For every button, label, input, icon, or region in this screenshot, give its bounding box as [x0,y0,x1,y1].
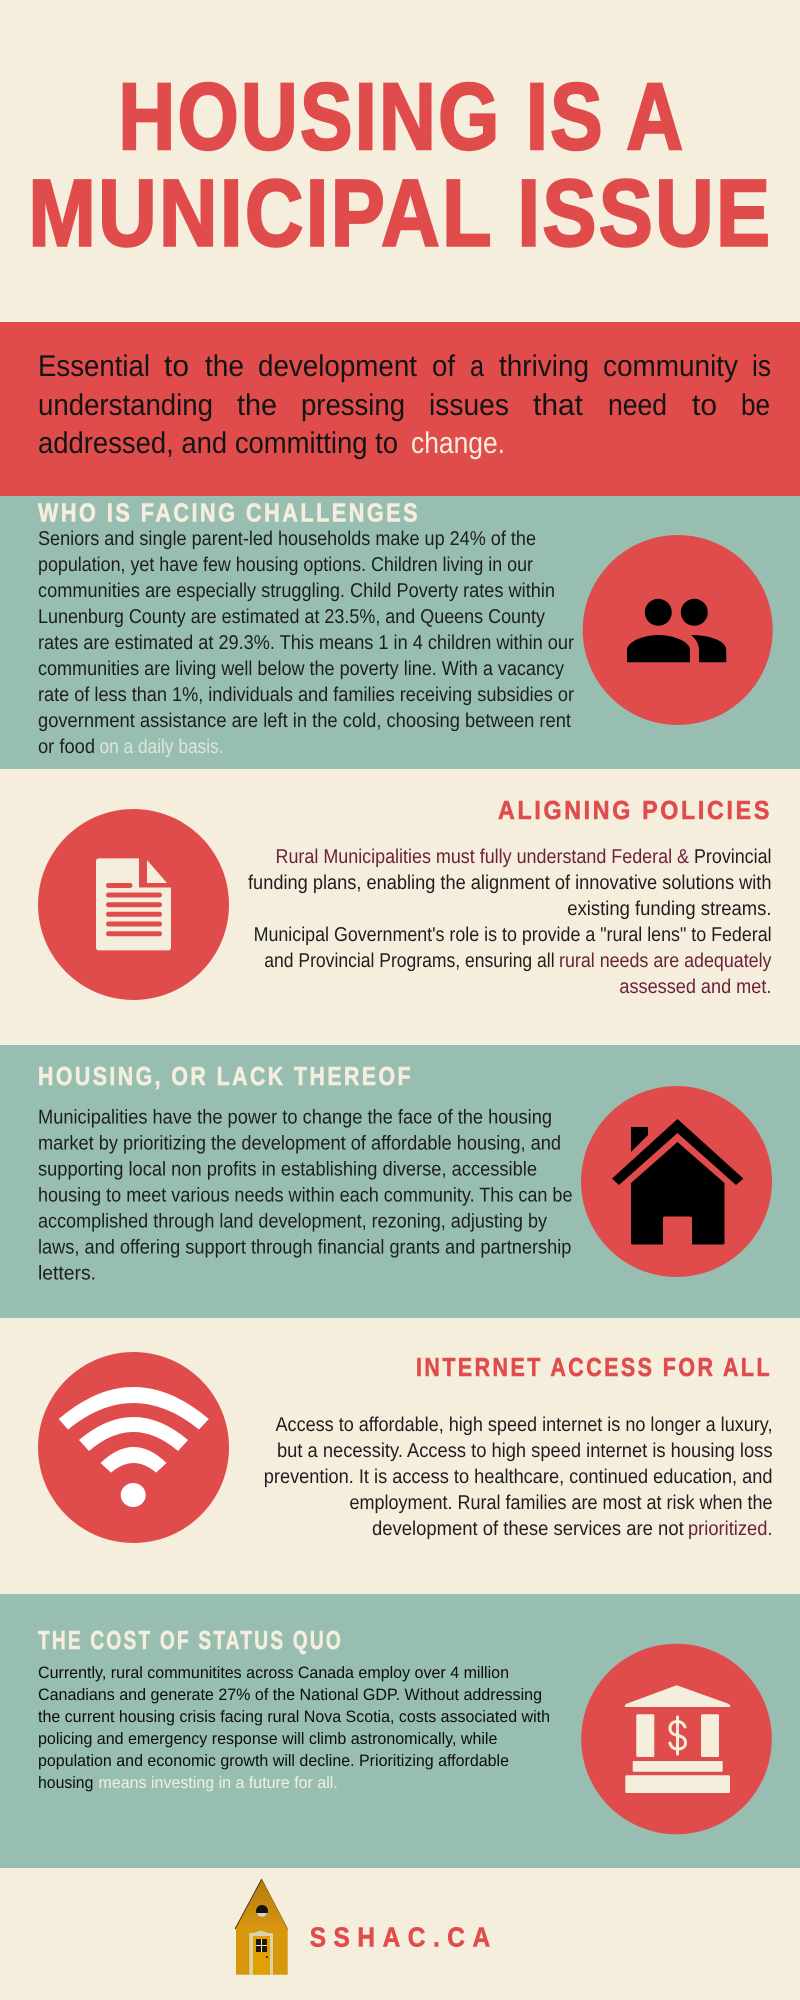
body text: policies: rural needs are adequately [559,950,772,972]
body text: cost: population and economic growth will decline. Prioritizing affordable [38,1752,509,1770]
icon: wifi [38,1352,229,1543]
body text: challenges: rate of less than 1%, individuals and families receiving subsidies or [38,684,574,706]
heading: who is facing challenges: WHO IS FACING CHALLENGES [38,498,420,528]
intro text: be [741,389,770,422]
panel: internet access for all [38,1352,772,1543]
panel: the cost of status quo [0,1594,800,1868]
body text: challenges: communities are living well below the poverty line. With a vacancy [38,658,564,680]
body text: housing [38,1106,572,1284]
body text: challenges: population, yet have few housing options. Children living in our [38,554,533,576]
body text: policies: existing funding streams. [567,898,772,920]
intro text: need [608,389,667,422]
body text: cost: Canadians and generate 27% of the National GDP. Without addressing [38,1686,542,1704]
icon: document [38,809,229,1000]
footer logo: yellow house [235,1879,288,1975]
body text: challenges: or food [38,736,95,758]
intro text: to [692,389,717,422]
body text: housing: letters. [38,1262,96,1284]
body text: housing: laws, and offering support through financial grants and partnership [38,1236,571,1258]
body text: policies [248,846,772,998]
intro text: the [205,350,244,383]
heading: aligning policies: ALIGNING POLICIES [498,795,772,825]
panel: housing, or lack thereof [0,1045,800,1318]
body text: cost: Currently, rural communitites across Canada employ over 4 million [38,1664,509,1682]
intro text: pressing [301,389,405,422]
body text: internet [264,1414,772,1540]
body text: housing: supporting local non profits in establishing diverse, accessible [38,1158,537,1180]
intro text: community [603,350,738,383]
heading: the cost of status quo: THE COST OF STATUS QUO [38,1625,343,1655]
body text: challenges: communities are especially struggling. Child Poverty rates within [38,580,555,602]
body text: cost: policing and emergency response will climb astronomically, while [38,1730,497,1748]
icon: people [583,535,773,725]
body text: policies: and Provincial Programs, ensuring all [264,950,555,972]
panel: who is facing challenges [0,496,800,769]
body text: challenges: Seniors and single parent-led households make up 24% of the [38,528,536,550]
body text: challenges: on a daily basis. [100,736,224,758]
intro text: of [432,350,456,383]
body text: policies: assessed and met. [619,976,771,998]
intro text: is [752,350,771,383]
intro text: that [533,389,584,422]
intro text: a [470,350,484,383]
intro text: understanding [38,389,213,422]
icon: house [581,1086,772,1277]
body text: housing: accomplished through land development, rezoning, adjusting by [38,1210,547,1232]
heading: housing, or lack thereof: HOUSING, OR LACK THEREOF [38,1061,413,1091]
body text: challenges: Lunenburg County are estimated at 23.5%, and Queens County [38,606,545,628]
panel: aligning policies [38,795,772,1000]
intro text: Essential [38,350,150,383]
body text: internet: development of these services are not [372,1518,684,1540]
icon: bank with dollar sign [581,1644,772,1834]
intro text: development [258,350,418,383]
body text: internet: prioritized. [688,1518,772,1540]
body text: cost [38,1664,550,1792]
title [28,64,772,266]
body text: housing: market by prioritizing the development of affordable housing, and [38,1132,561,1154]
intro text: issues [429,389,509,422]
body text: cost: means investing in a future for all. [98,1774,338,1792]
intro text: addressed, and committing to [38,427,398,460]
body text: challenges: rates are estimated at 29.3%. This means 1 in 4 children within our [38,632,574,654]
body text: challenges [38,528,574,758]
body text: housing: Municipalities have the power to change the face of the housing [38,1106,552,1128]
body text: policies: Provincial [694,846,772,868]
footer website label: SSHAC.CA [310,1922,498,1953]
body text: housing: housing to meet various needs within each community. This can be [38,1184,572,1206]
body text: cost: housing [38,1774,93,1792]
panel: intro statement [0,322,800,496]
body text: policies: Rural Municipalities must fully understand Federal & [276,846,690,868]
title: HOUSING IS A [118,64,686,170]
intro text: the [237,389,277,422]
intro text: thriving [499,350,589,383]
body text: cost: the current housing crisis facing rural Nova Scotia, costs associated with [38,1708,550,1726]
intro text: change. [411,427,505,460]
intro text [38,350,771,460]
body text: challenges: government assistance are left in the cold, choosing between rent [38,710,571,732]
intro text: to [164,350,189,383]
